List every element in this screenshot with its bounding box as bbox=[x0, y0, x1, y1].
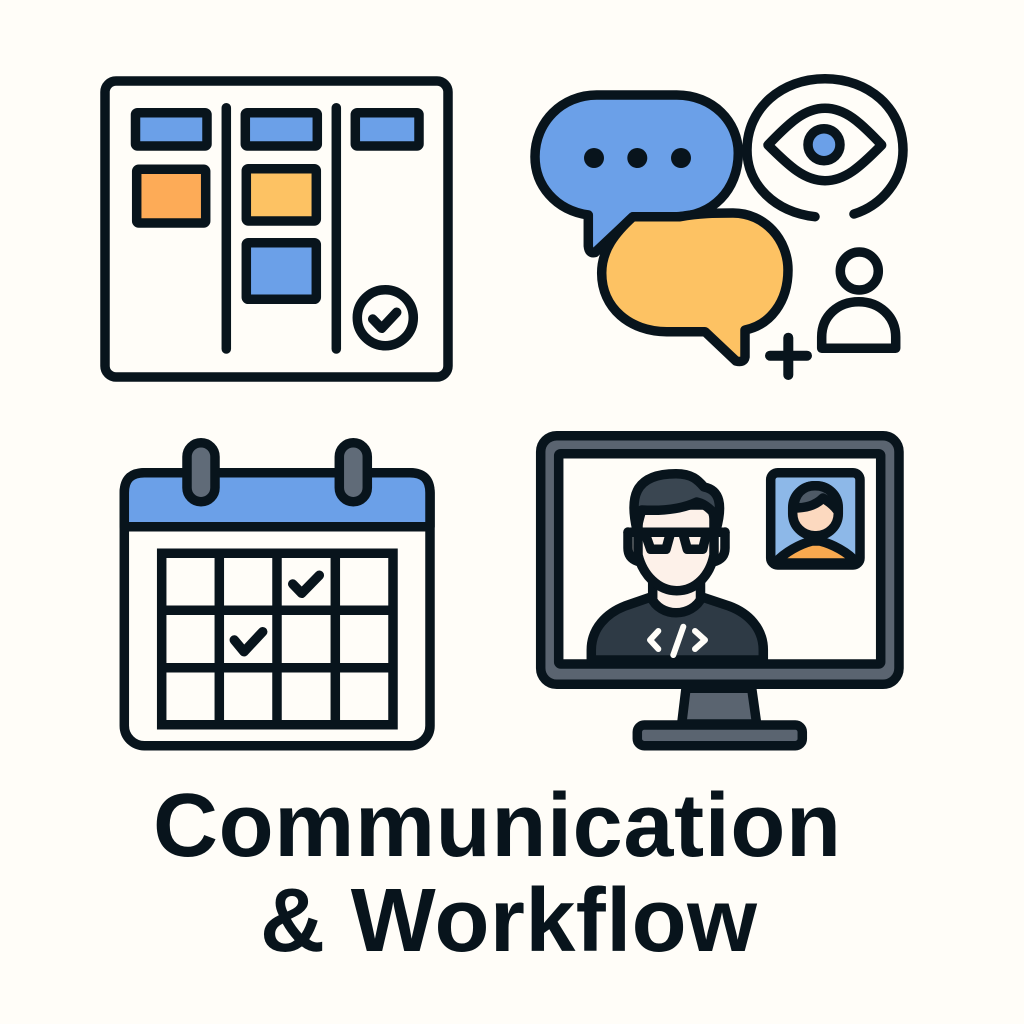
participant head bbox=[793, 486, 838, 536]
developer glasses bbox=[628, 532, 725, 549]
calendar body bbox=[124, 473, 430, 746]
panel: video call monitor icon bbox=[541, 436, 899, 746]
developer shirt bbox=[591, 597, 763, 660]
monitor bezel bbox=[541, 436, 899, 684]
monitor base bbox=[637, 725, 802, 746]
participant shoulders bbox=[775, 541, 857, 563]
calendar ring left bbox=[187, 443, 215, 502]
developer neck skin bbox=[653, 580, 700, 618]
date grid bbox=[162, 553, 393, 725]
check mark: upper date bbox=[293, 575, 319, 593]
developer avatar bbox=[591, 474, 763, 660]
column dividers bbox=[226, 108, 336, 349]
check mark: lower date bbox=[234, 632, 263, 652]
title bbox=[153, 776, 841, 971]
developer neck outline bbox=[653, 582, 700, 598]
panel: chat, visibility and add-person icons bbox=[535, 79, 903, 375]
panel: calendar icon bbox=[124, 443, 430, 746]
calendar blue header bbox=[124, 473, 430, 527]
code symbol on shirt bbox=[650, 627, 705, 655]
panel: kanban board icon bbox=[105, 81, 448, 377]
monitor screen bbox=[559, 454, 881, 664]
calendar ring right bbox=[339, 443, 367, 502]
developer hair bbox=[634, 474, 720, 530]
card: blue header column 3 bbox=[355, 113, 419, 146]
icon: blue speech bubble bbox=[535, 95, 738, 253]
developer ears bbox=[628, 532, 725, 562]
card: blue task bbox=[246, 243, 316, 299]
card: blue header column 1 bbox=[136, 113, 207, 146]
developer face bbox=[638, 505, 714, 591]
card: orange task bbox=[137, 169, 206, 223]
icon: eye in open circle bbox=[747, 79, 903, 217]
title: Communication bbox=[153, 776, 841, 876]
card: yellow task bbox=[246, 169, 316, 221]
card: blue header column 2 bbox=[245, 113, 317, 146]
picture-in-picture participant bbox=[771, 473, 860, 565]
icon: add person bbox=[770, 252, 896, 375]
participant tile bbox=[771, 473, 860, 565]
title: & Workflow bbox=[260, 871, 758, 971]
icon: circled check mark bbox=[357, 290, 413, 346]
board frame bbox=[105, 81, 448, 377]
monitor stand bbox=[682, 688, 757, 724]
icon: yellow speech bubble bbox=[602, 213, 788, 362]
participant hair bbox=[794, 486, 837, 510]
